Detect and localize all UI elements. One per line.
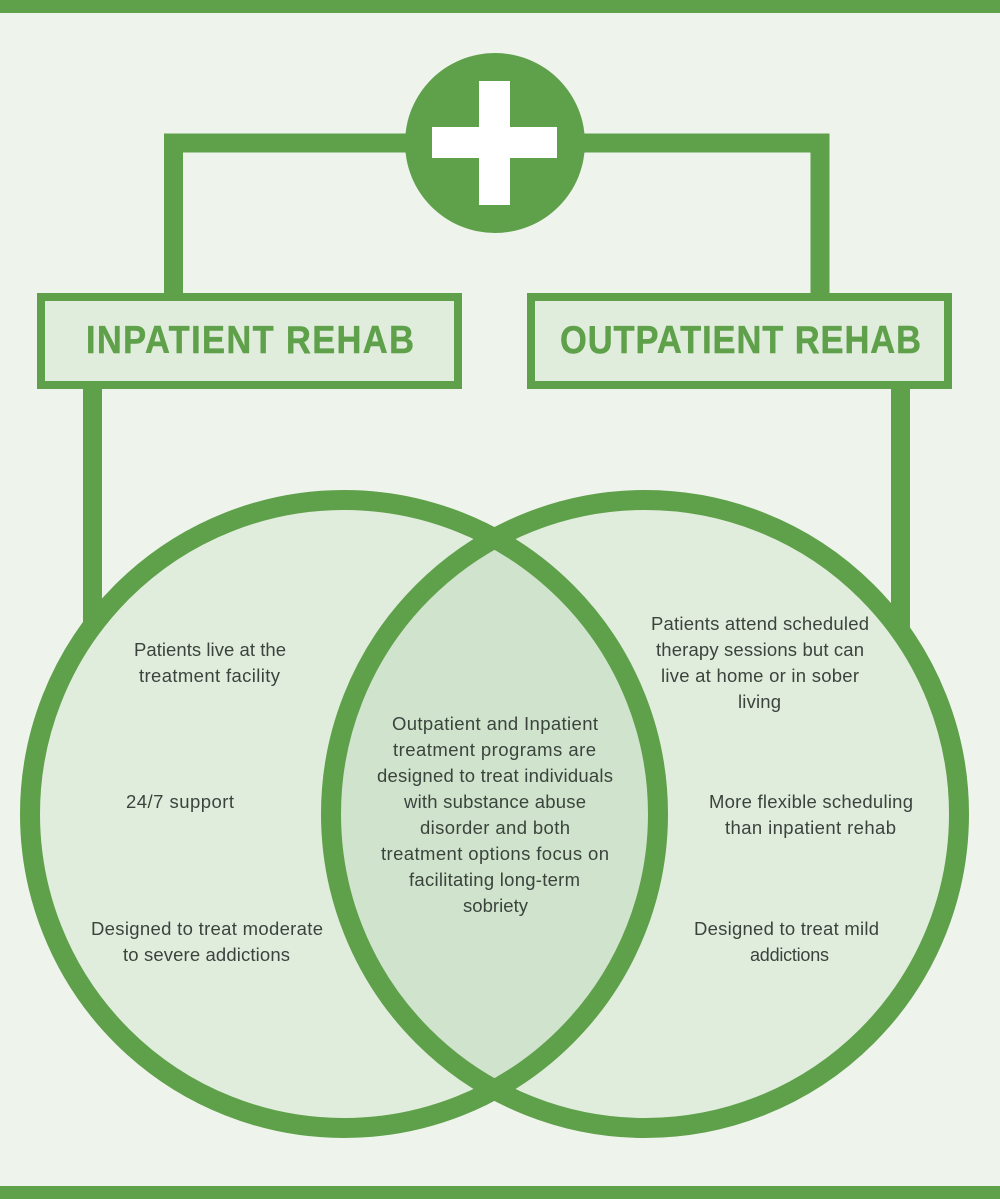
text: inpatient severity: to severe addictions bbox=[123, 944, 290, 965]
connector: plus icon to both heading boxes bbox=[174, 143, 820, 293]
text: outpatient severity: addictions bbox=[750, 945, 829, 965]
venn diagram bbox=[30, 500, 959, 1128]
text: inpatient severity: Designed to treat moderate bbox=[91, 918, 323, 939]
text: outpatient severity bbox=[694, 918, 879, 965]
venn: left circle bbox=[30, 500, 658, 1128]
heading: outpatient rehab bbox=[531, 297, 948, 385]
text: shared characteristics: designed to treat individuals bbox=[377, 765, 613, 786]
text: outpatient living arrangement: living bbox=[738, 691, 781, 712]
venn: overlap area bbox=[341, 550, 648, 1078]
bottom border bar bbox=[0, 1186, 1000, 1199]
text: shared characteristics: treatment programs are bbox=[393, 739, 596, 760]
text: outpatient living arrangement: Patients attend scheduled bbox=[651, 613, 869, 634]
text: outpatient living arrangement: therapy sessions but can bbox=[656, 639, 864, 660]
text: shared characteristics: sobriety bbox=[463, 895, 529, 916]
connector: outpatient heading to right circle bbox=[891, 385, 910, 630]
text: outpatient severity: Designed to treat mild bbox=[694, 918, 879, 939]
heading: inpatient rehab: INPATIENT REHAB bbox=[86, 318, 414, 361]
heading: outpatient rehab: OUTPATIENT REHAB bbox=[560, 318, 921, 361]
text: shared characteristics: with substance abuse bbox=[403, 791, 586, 812]
text: inpatient lives at facility: treatment facility bbox=[139, 665, 281, 686]
text: inpatient lives at facility bbox=[134, 639, 286, 686]
text: outpatient living arrangement bbox=[651, 613, 869, 712]
text: outpatient flexibility bbox=[709, 791, 913, 838]
icon: medical plus in circle bbox=[405, 53, 585, 233]
text: shared characteristics: Outpatient and Inpatient bbox=[392, 713, 598, 734]
top border bar bbox=[0, 0, 1000, 13]
text: inpatient lives at facility: Patients live at the bbox=[134, 639, 286, 660]
text: outpatient flexibility: More flexible scheduling bbox=[709, 791, 913, 812]
text: shared characteristics bbox=[377, 713, 613, 916]
text: shared characteristics: facilitating long-term bbox=[409, 869, 580, 890]
text: inpatient severity bbox=[91, 918, 323, 965]
text: outpatient living arrangement: live at home or in sober bbox=[661, 665, 859, 686]
text: shared characteristics: disorder and both bbox=[420, 817, 570, 838]
venn: right circle bbox=[331, 500, 959, 1128]
venn: circle outlines bbox=[30, 500, 959, 1128]
text: outpatient flexibility: than inpatient rehab bbox=[725, 817, 896, 838]
text: inpatient 24/7 support: 24/7 support bbox=[126, 791, 234, 812]
connector: inpatient heading to left circle bbox=[83, 385, 102, 625]
heading: inpatient rehab bbox=[41, 297, 458, 385]
text: shared characteristics: treatment options focus on bbox=[381, 843, 609, 864]
